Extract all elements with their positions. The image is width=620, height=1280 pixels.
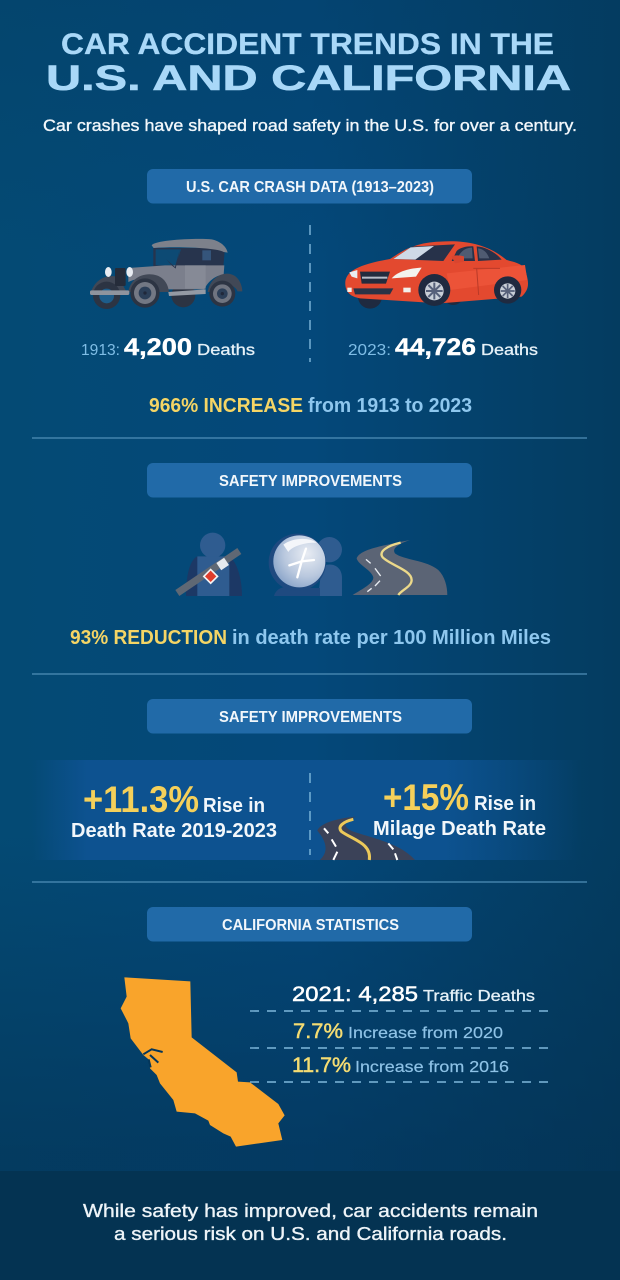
- stat: 2023 deaths: 44,726: [395, 334, 476, 361]
- stat: 2021 traffic deaths: Traffic Deaths: [423, 988, 535, 1005]
- icon: road: [317, 817, 415, 860]
- icon: road: [353, 540, 447, 595]
- section header: U.S. car crash data: [147, 169, 472, 204]
- title: U.S. AND CALIFORNIA: [46, 59, 571, 98]
- section header: safety improvements second: SAFETY IMPROVEMENTS: [219, 709, 402, 726]
- icon: vintage car 1913: [90, 239, 242, 309]
- divider: dashed vertical: [309, 225, 311, 362]
- divider: dashed vertical: [309, 773, 311, 855]
- stat: 7.7% increase: 7.7%: [293, 1020, 343, 1043]
- stat: 11.7% increase: Increase from 2016: [355, 1059, 509, 1076]
- stat: +11.3%: Rise in: [203, 795, 265, 817]
- stat: 1913 deaths: 4,200: [124, 334, 192, 361]
- panel: 1913 vs 2023 comparison: [81, 225, 538, 362]
- stat: 2023 deaths: [348, 334, 538, 361]
- stat: 7.7% increase: Increase from 2020: [348, 1025, 503, 1042]
- stat: 2023 deaths: Deaths: [481, 342, 538, 359]
- section header: safety improvements: [147, 463, 472, 498]
- stat: +15%: +15%: [383, 777, 469, 818]
- footer text: While safety has improved, car accidents remain: [83, 1200, 538, 1221]
- stat: 11.7% increase: [292, 1054, 509, 1077]
- map: California: [121, 977, 285, 1147]
- footer text: a serious risk on U.S. and California roads.: [114, 1223, 507, 1244]
- callout: 966% increase: 966% INCREASE: [149, 395, 303, 417]
- section header: safety improvements second: [147, 699, 472, 734]
- stat: +15%: Milage Death Rate: [373, 818, 546, 840]
- stat: 2023 deaths: 2023:: [348, 342, 391, 359]
- stat: 11.7% increase: 11.7%: [292, 1054, 351, 1077]
- stat: 1913 deaths: [81, 334, 255, 361]
- stat: +11.3%: [71, 779, 277, 842]
- section header: California statistics: [147, 907, 472, 942]
- title: [46, 28, 571, 98]
- subtitle: Car crashes have shaped road safety in the U.S. for over a century.: [43, 117, 577, 135]
- section header: California statistics: CALIFORNIA STATISTICS: [222, 917, 399, 934]
- callout: 93% reduction: [70, 627, 551, 649]
- band background: [32, 760, 582, 860]
- section header: safety improvements: SAFETY IMPROVEMENTS: [219, 473, 402, 490]
- icon: airbag: [269, 534, 342, 596]
- panel: California stats: [250, 983, 548, 1082]
- callout: 966% increase: [149, 395, 472, 417]
- stat: +11.3%: +11.3%: [83, 779, 199, 820]
- panel: safety icons: [175, 533, 447, 596]
- footer panel: [0, 1171, 620, 1280]
- icon: seatbelt: [175, 533, 242, 596]
- stat: 7.7% increase: [293, 1020, 503, 1043]
- callout: 93% reduction: in death rate per 100 Million Miles: [232, 627, 551, 649]
- stat: +15%: Rise in: [474, 793, 536, 815]
- title: CAR ACCIDENT TRENDS IN THE: [61, 28, 554, 61]
- callout: 93% reduction: 93% REDUCTION: [70, 627, 227, 649]
- stat: 1913 deaths: 1913:: [81, 342, 120, 359]
- stat: +15%: [373, 777, 546, 840]
- footer text: [83, 1200, 538, 1244]
- stat: 1913 deaths: Deaths: [197, 342, 255, 359]
- panel: rise in death rate: [32, 760, 582, 860]
- section header: U.S. car crash data: U.S. CAR CRASH DATA (1913–2023): [186, 179, 434, 196]
- callout: 966% increase: from 1913 to 2023: [308, 395, 472, 417]
- stat: +11.3%: Death Rate 2019-2023: [71, 820, 277, 842]
- stat: 2021 traffic deaths: [292, 983, 535, 1006]
- icon: modern red car: [345, 241, 528, 309]
- stat: 2021 traffic deaths: 2021: 4,285: [292, 983, 418, 1006]
